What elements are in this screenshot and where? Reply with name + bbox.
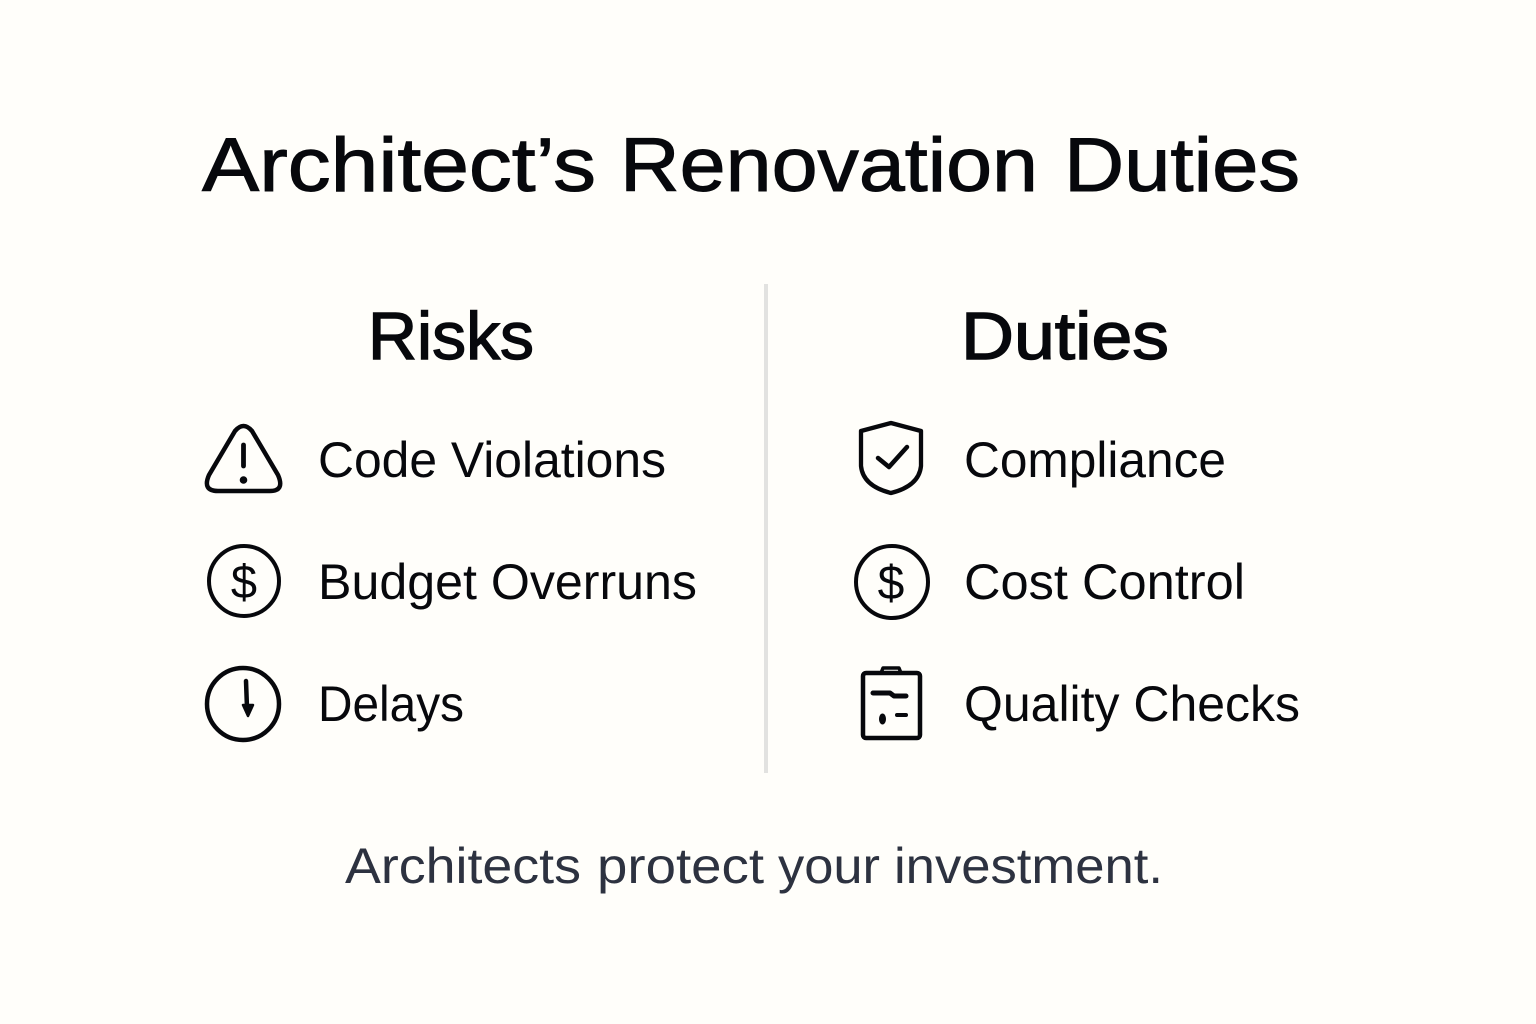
- title: Renovation: [620, 123, 1038, 208]
- icon: dollar circle: $: [878, 557, 904, 610]
- icon: dollar circle: $: [231, 555, 257, 608]
- risk item: delays: [207, 668, 464, 740]
- duty item: cost control: [856, 546, 1245, 618]
- title: Duties: [1064, 123, 1300, 208]
- risk item: budget overruns: [209, 546, 697, 616]
- heading: risks: Risks: [368, 299, 534, 374]
- icon: warning triangle: [207, 426, 280, 491]
- footer tagline: Architects: [345, 838, 581, 894]
- panel: duties: [856, 299, 1300, 738]
- heading: duties: Duties: [961, 299, 1169, 374]
- duty item: cost control: Cost Control: [964, 554, 1245, 610]
- duty item: compliance: Compliance: [964, 432, 1226, 488]
- footer tagline: [345, 838, 1163, 894]
- icon: clock: [207, 668, 279, 740]
- icon: dollar circle: [209, 546, 279, 616]
- icon: dollar circle: [856, 546, 928, 618]
- duty item: quality checks: Quality Checks: [964, 676, 1300, 732]
- risk item: delays: Delays: [318, 676, 464, 732]
- title: Architect’s: [202, 123, 596, 208]
- footer tagline: protect: [597, 838, 764, 894]
- panel: risks: [207, 299, 697, 740]
- risk item: code violations: Code Violations: [318, 432, 666, 488]
- duty item: compliance: [861, 423, 1226, 493]
- risk item: budget overruns: Budget Overruns: [318, 554, 697, 610]
- icon: clipboard: [863, 668, 920, 738]
- risk item: code violations: [207, 426, 666, 491]
- title: [202, 123, 1300, 208]
- duty item: quality checks: [863, 668, 1300, 738]
- footer tagline: investment.: [894, 838, 1163, 894]
- icon: shield check: [861, 423, 921, 493]
- footer tagline: your: [778, 838, 880, 894]
